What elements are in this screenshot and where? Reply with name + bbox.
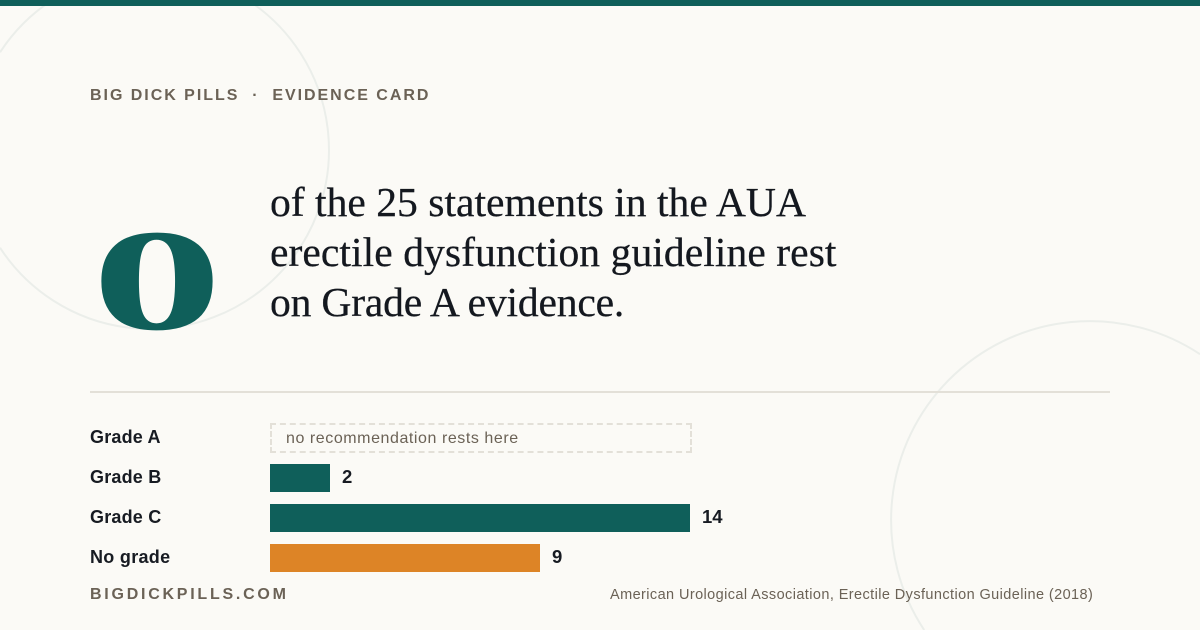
headline: erectile dysfunction guideline rest [270, 229, 837, 275]
row: Grade B: Grade B [90, 467, 161, 487]
footer site name: BIGDICKPILLS.COM [90, 586, 289, 603]
row: Grade C: Grade C [90, 507, 161, 527]
decorative circle: bottom right [890, 320, 1200, 630]
row: Grade B: 2 [342, 466, 352, 487]
divider [90, 391, 1110, 393]
row: Grade C: 14 [702, 506, 723, 527]
row: Grade C [90, 504, 723, 532]
row: No grade: 9 [552, 546, 562, 567]
headline: on Grade A evidence. [270, 279, 624, 325]
row: Grade A: no recommendation rests here [286, 430, 519, 447]
row: Grade A [90, 423, 692, 453]
row: No grade [90, 544, 562, 572]
headline: of the 25 statements in the AUA [270, 179, 806, 225]
eyebrow: BIG DICK PILLS · EVIDENCE CARD [90, 87, 430, 104]
decorative circle: top left [0, 6, 330, 330]
top accent bar [0, 0, 1200, 6]
row: No grade: No grade [90, 547, 170, 567]
row: Grade B [90, 464, 352, 492]
row: Grade A: Grade A [90, 427, 161, 447]
headline [270, 179, 837, 325]
bar chart [90, 423, 723, 572]
footer source: American Urological Association, Erectile Dysfunction Guideline (2018) [610, 587, 1093, 603]
